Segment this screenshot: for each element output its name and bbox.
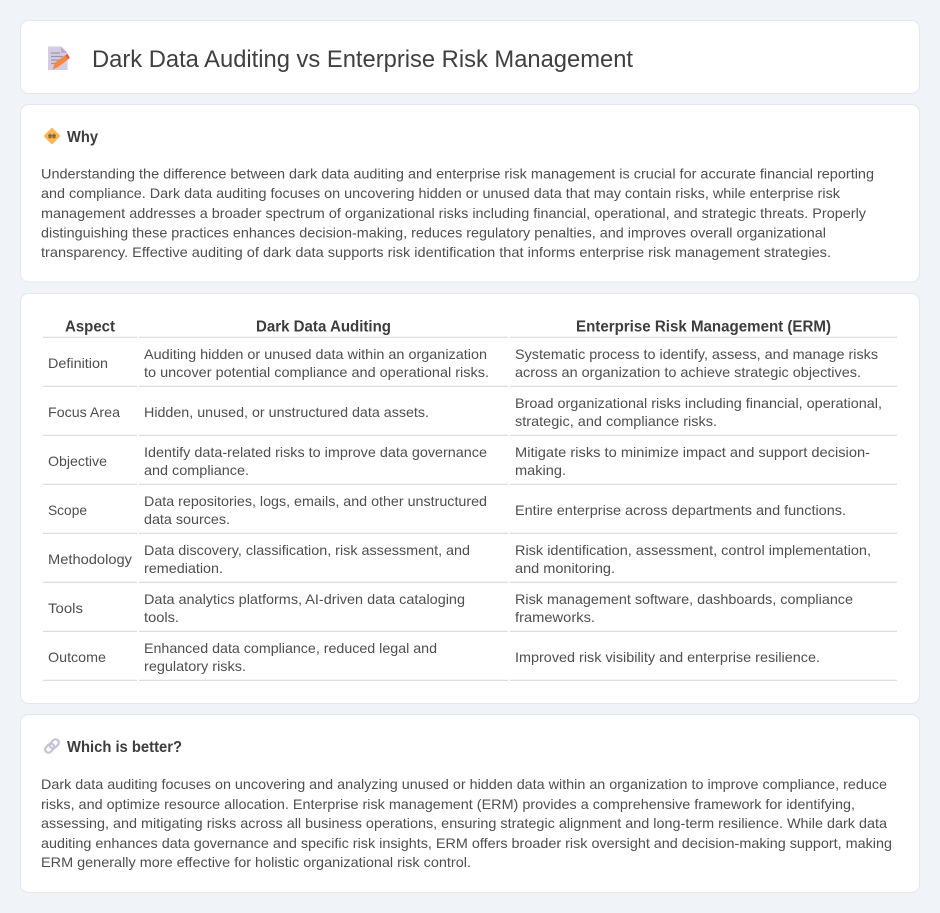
text block: which is better: risks, and optimize resource allocation. Enterprise risk management (ERM) provides a comprehensive framework for identifying,: [41, 796, 855, 812]
table header row: Dark Data Auditing: [256, 318, 391, 336]
row: objective: making.: [515, 462, 566, 478]
row: outcome: Outcome: [48, 649, 106, 665]
row: definition: [48, 346, 878, 380]
row: focus area: Hidden, unused, or unstructured data assets.: [144, 404, 429, 420]
row: objective: Objective: [48, 453, 107, 469]
row: focus area: Focus Area: [48, 404, 120, 420]
icon: warning diamond: [44, 128, 60, 144]
panel: which is better: [20, 714, 920, 892]
text block: why: distinguishing these practices enhances decision-making, reduces regulatory penalties, and improves overall organizational: [41, 224, 826, 240]
text block: which is better: [41, 776, 892, 870]
icon: document with pencil: [48, 46, 70, 70]
row: focus area: [48, 395, 882, 429]
row: objective: and compliance.: [144, 462, 249, 478]
text block: why: transparency. Effective auditing of dark data supports risk identification that informs enterprise risk management strategies.: [41, 244, 831, 260]
text block: which is better: assessing, and mitigating risks across all business operations, ensuring strategic alignment and long-term resilience. While dark data: [41, 815, 887, 831]
row: tools: [48, 591, 853, 625]
title: Dark Data Auditing vs Enterprise Risk Management: [92, 46, 633, 73]
panel: comparison table: [20, 294, 920, 704]
text block: which is better: Dark data auditing focuses on uncovering and analyzing unused or hidden data within an organization to improve compliance, reduce: [41, 776, 887, 792]
row: tools: frameworks.: [515, 609, 595, 625]
row: tools: tools.: [144, 609, 179, 625]
row: methodology: Methodology: [48, 551, 132, 567]
row: outcome: regulatory risks.: [144, 658, 246, 674]
panel: why: [20, 104, 920, 282]
row: definition: across an organization to achieve strategic objectives.: [515, 364, 861, 380]
row: definition: to uncover potential compliance and operational risks.: [144, 364, 489, 380]
row: scope: Entire enterprise across departments and functions.: [515, 502, 846, 518]
row: scope: Data repositories, logs, emails, and other unstructured: [144, 493, 487, 509]
text block: why: and compliance. Dark data auditing focuses on uncovering hidden or unused data that may contain risks, while enterprise risk: [41, 185, 841, 201]
row: objective: Mitigate risks to minimize impact and support decision-: [515, 444, 870, 460]
text block: which is better: auditing enhances data governance and specific risk insights, ERM offers broader risk oversight and decision-making support, making: [41, 835, 892, 851]
row: focus area: Broad organizational risks including financial, operational,: [515, 395, 882, 411]
row: scope: [48, 493, 846, 527]
row: methodology: Data discovery, classification, risk assessment, and: [144, 542, 470, 558]
row: methodology: and monitoring.: [515, 560, 615, 576]
panel: header: [20, 20, 920, 94]
text block: why: management addresses a broader spectrum of organizational risks including financial, operational, and strategic threats. Properly: [41, 205, 866, 221]
row: definition: Auditing hidden or unused data within an organization: [144, 346, 487, 362]
row: focus area: strategic, and compliance risks.: [515, 413, 717, 429]
heading: why: Why: [67, 129, 98, 146]
row: definition: Definition: [48, 355, 108, 371]
row: tools: Data analytics platforms, AI-driven data cataloging: [144, 591, 465, 607]
row: objective: [48, 444, 870, 478]
row: methodology: remediation.: [144, 560, 223, 576]
row: outcome: Enhanced data compliance, reduced legal and: [144, 640, 437, 656]
table header row: Enterprise Risk Management (ERM): [576, 318, 831, 336]
table header row: [65, 318, 831, 336]
row: objective: Identify data-related risks to improve data governance: [144, 444, 487, 460]
row: methodology: [48, 542, 871, 576]
row: methodology: Risk identification, assessment, control implementation,: [515, 542, 871, 558]
row: outcome: Improved risk visibility and enterprise resilience.: [515, 649, 820, 665]
text block: why: [41, 166, 874, 260]
text block: why: Understanding the difference between dark data auditing and enterprise risk management is crucial for accurate financial reporting: [41, 166, 874, 182]
row: scope: Scope: [48, 502, 87, 518]
row: outcome: [48, 640, 820, 674]
row: tools: Risk management software, dashboards, compliance: [515, 591, 853, 607]
row: scope: data sources.: [144, 511, 230, 527]
text block: which is better: ERM generally more effective for holistic organizational risk control.: [41, 854, 471, 870]
table header row: Aspect: [65, 318, 116, 336]
row: tools: Tools: [48, 600, 83, 616]
row: definition: Systematic process to identify, assess, and manage risks: [515, 346, 878, 362]
heading: which is better: Which is better?: [67, 739, 182, 756]
icon: link: [44, 738, 60, 754]
